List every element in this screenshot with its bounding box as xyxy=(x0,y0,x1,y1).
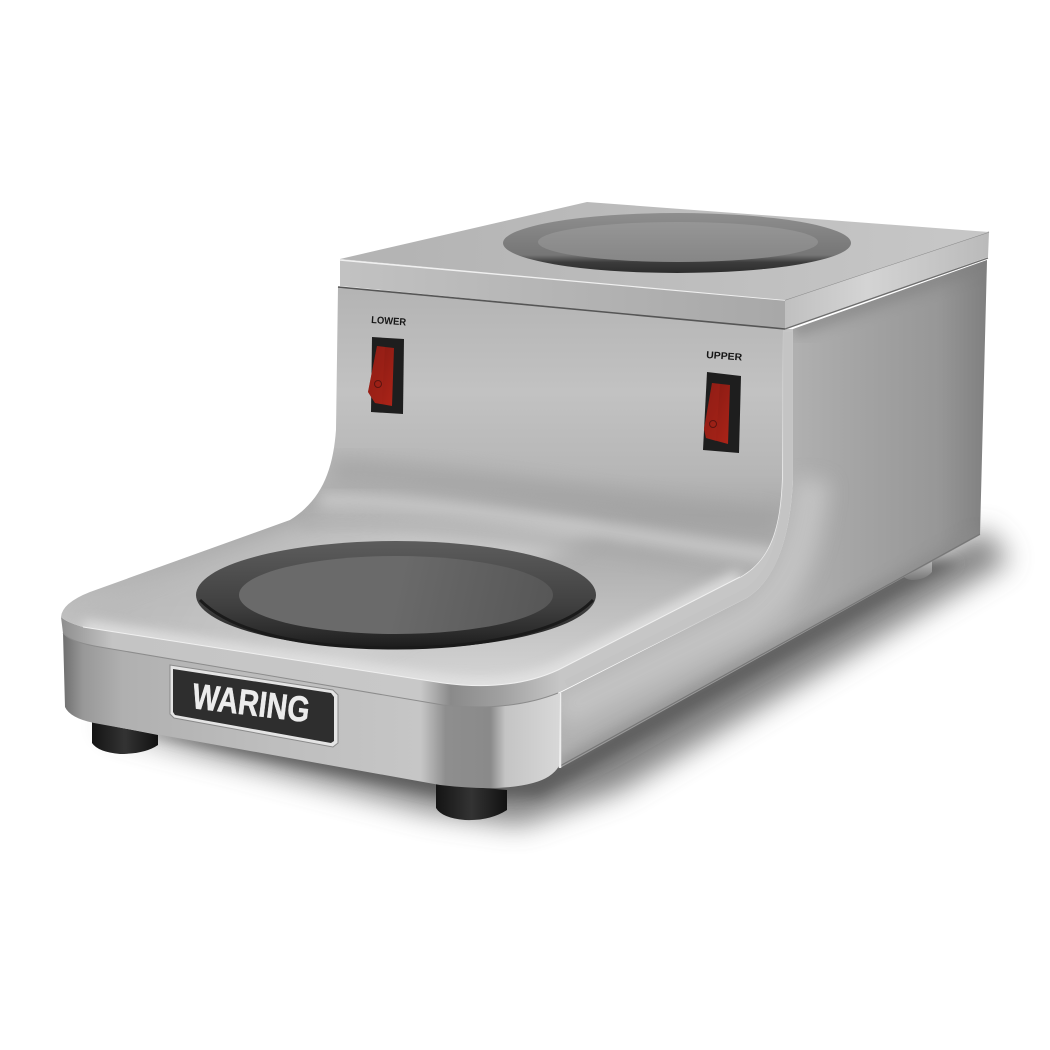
top lid: front edge xyxy=(338,259,785,329)
side panel xyxy=(560,260,987,768)
label: UPPER: UPPER xyxy=(706,350,743,364)
upper warming plate xyxy=(503,213,851,273)
base lip and curved trim xyxy=(61,329,793,707)
foot: front left xyxy=(92,722,158,754)
base front xyxy=(63,633,560,788)
label: LOWER: LOWER xyxy=(371,315,407,328)
top lid: right edge xyxy=(785,232,989,329)
foot: front right xyxy=(436,784,507,820)
rocker switch: upper xyxy=(703,372,741,453)
Waring badge xyxy=(170,665,338,747)
Waring badge: WARING xyxy=(190,675,312,730)
rocker switch: lower xyxy=(368,337,404,414)
top surface xyxy=(340,202,989,300)
lower warming plate xyxy=(196,541,596,649)
front panel and base top xyxy=(60,287,783,690)
rear foot xyxy=(902,556,932,580)
floor shadow xyxy=(95,530,1010,825)
